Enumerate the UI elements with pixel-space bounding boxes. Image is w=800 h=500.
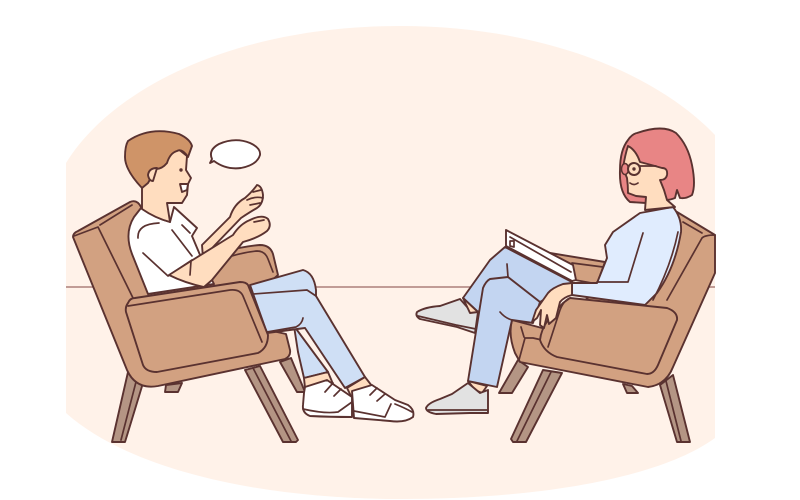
hair — [125, 131, 192, 188]
glasses — [622, 163, 656, 175]
chair legs, right — [499, 360, 690, 442]
far armrest, left — [205, 245, 278, 300]
chair back detail, right — [519, 222, 715, 360]
face and neck — [142, 148, 191, 222]
chair back, right — [511, 212, 715, 387]
speech bubble — [210, 140, 260, 168]
man: sleeve crease — [190, 261, 191, 275]
man: shirt — [128, 207, 214, 294]
chair back detail, left — [74, 205, 134, 300]
man: back arm — [202, 185, 263, 258]
smile — [630, 183, 638, 184]
woman: top shoe sole — [418, 316, 476, 329]
shoe left — [303, 380, 352, 417]
hair — [620, 128, 694, 203]
man: leg details — [253, 290, 316, 332]
man: hand fingers — [247, 190, 264, 222]
woman: head — [620, 128, 694, 210]
man: front arm — [169, 217, 270, 287]
man: under leg — [294, 326, 328, 378]
woman: hand — [532, 283, 572, 328]
chair base and back, left — [73, 201, 290, 387]
woman: leg detail — [500, 264, 512, 320]
man: ankle — [304, 372, 372, 398]
right armchair — [499, 212, 715, 442]
ear — [148, 168, 157, 181]
woman: bottom shoe sole — [428, 409, 487, 411]
man: upper leg — [250, 270, 365, 388]
far armrest, right — [550, 253, 605, 284]
woman: ankle, lower — [468, 381, 487, 393]
background blob — [66, 26, 715, 499]
man: shoes — [303, 380, 413, 422]
left armrest cushion — [126, 282, 268, 372]
eye — [179, 168, 183, 172]
woman: lower leg — [468, 277, 540, 387]
man: head — [125, 131, 192, 222]
floor line — [66, 286, 715, 288]
face and neck — [623, 146, 675, 210]
right armrest cushion — [540, 298, 677, 374]
woman: ankle — [463, 298, 478, 313]
woman: clipboard — [506, 230, 576, 281]
left armchair — [73, 201, 305, 442]
woman: sweater — [572, 207, 681, 305]
chair legs, left — [112, 358, 305, 442]
woman: bottom shoe — [426, 383, 488, 414]
man: shirt details — [138, 223, 192, 276]
woman: under leg, crossed — [463, 247, 572, 312]
shoe right — [352, 385, 413, 422]
woman: top shoe — [416, 299, 478, 333]
mouth — [180, 184, 188, 192]
